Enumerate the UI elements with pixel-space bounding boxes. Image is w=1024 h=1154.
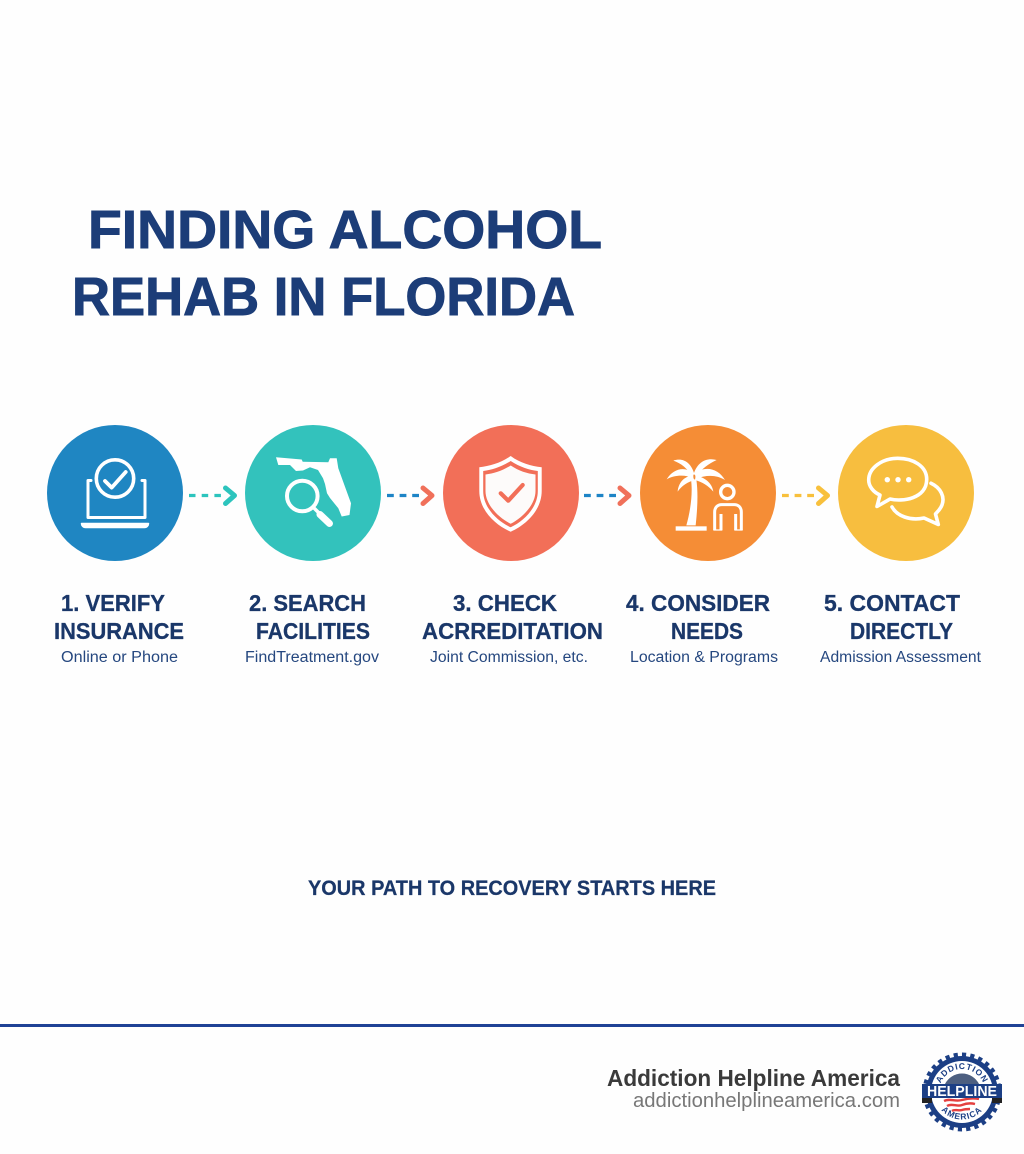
step 4 heading: 4. CONSIDER xyxy=(626,590,770,616)
arrow 1 to 2 xyxy=(189,488,234,504)
panel: step 5 contact directly xyxy=(820,425,982,666)
panel: step 1 verify insurance xyxy=(47,425,184,666)
step 4 caption: Location & Programs xyxy=(630,649,778,666)
panel: step 2 search facilities xyxy=(245,425,381,666)
arrow 4 to 5 xyxy=(782,488,828,504)
step 4 circle xyxy=(640,425,776,561)
tagline: YOUR PATH TO RECOVERY STARTS HERE xyxy=(308,877,716,900)
footer brand text: Addiction Helpline America xyxy=(607,1065,900,1091)
title: FINDING ALCOHOL xyxy=(88,200,602,260)
step 1 circle xyxy=(47,425,183,561)
arrow 2 to 3 xyxy=(387,488,432,504)
icon: palm tree and person xyxy=(667,459,743,531)
logo badge: AMERICA xyxy=(941,1107,982,1120)
step 2 caption: FindTreatment.gov xyxy=(245,649,379,666)
logo badge xyxy=(922,1052,1002,1132)
step 5 heading: DIRECTLY xyxy=(850,618,953,644)
icon: shield with check xyxy=(479,456,542,532)
step 3 heading: ACRREDITATION xyxy=(422,618,603,644)
icon: speech bubbles xyxy=(869,458,943,524)
step 2 heading: 2. SEARCH xyxy=(249,590,366,616)
step 5 caption: Admission Assessment xyxy=(820,649,982,666)
panel: step 3 check accreditation xyxy=(422,425,603,666)
step 1 heading xyxy=(54,590,184,644)
step 5 heading xyxy=(824,590,961,644)
footer brand text xyxy=(607,1065,900,1112)
logo badge: ADDICTION xyxy=(936,1063,988,1084)
step 4 heading xyxy=(626,590,770,644)
step 4 heading: NEEDS xyxy=(671,618,743,644)
step 2 heading xyxy=(249,590,370,644)
step 2 heading: FACILITIES xyxy=(256,618,370,644)
step 3 heading: 3. CHECK xyxy=(453,590,557,616)
title: REHAB IN FLORIDA xyxy=(72,267,575,327)
step 2 circle xyxy=(245,425,381,561)
arrow 3 to 4 xyxy=(584,488,629,504)
footer brand text: addictionhelplineamerica.com xyxy=(633,1090,900,1112)
step 1 caption: Online or Phone xyxy=(61,649,178,666)
step 5 circle xyxy=(838,425,974,561)
step 3 caption: Joint Commission, etc. xyxy=(430,649,588,666)
step 3 circle xyxy=(443,425,579,561)
step 5 heading: 5. CONTACT xyxy=(824,590,961,616)
logo badge: HELPLINE xyxy=(927,1084,997,1100)
title xyxy=(72,200,602,327)
step 3 heading xyxy=(422,590,603,644)
icon: laptop with check xyxy=(82,460,148,528)
panel: step 4 consider needs xyxy=(626,425,778,666)
step 1 heading: 1. VERIFY xyxy=(61,590,165,616)
icon: Florida map with magnifier xyxy=(276,457,351,524)
step 1 heading: INSURANCE xyxy=(54,618,184,644)
